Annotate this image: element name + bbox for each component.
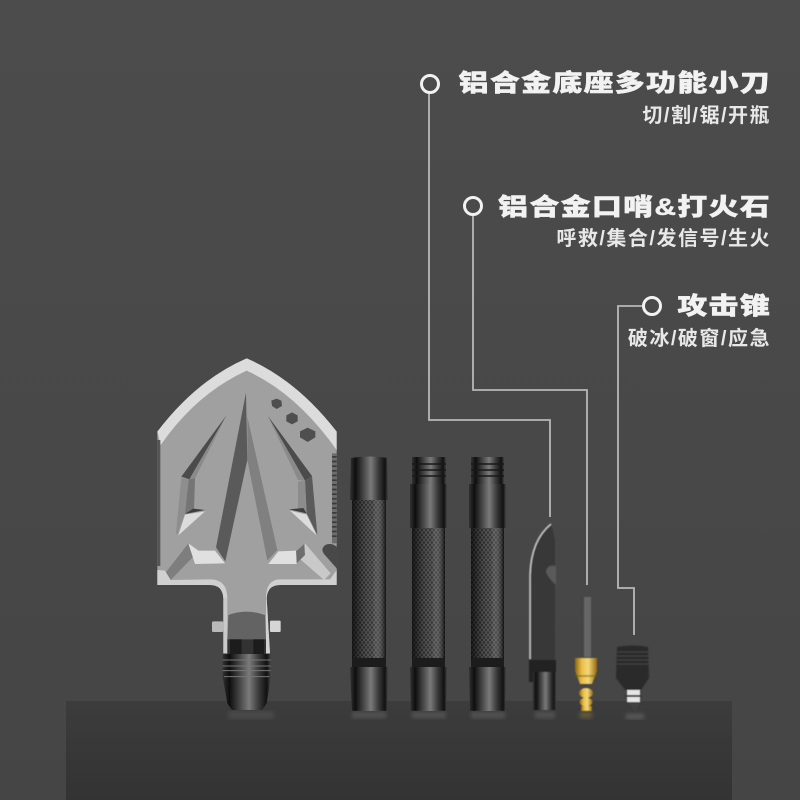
- cone body: [616, 646, 649, 690]
- lower left wing facets: [165, 543, 193, 580]
- knife blade: [529, 523, 555, 660]
- subtext 3: 破冰/破窗/应急: [628, 326, 771, 350]
- marker circle 2: [464, 198, 482, 214]
- icon: tube 2: [410, 457, 447, 711]
- marker circle 3: [644, 298, 660, 314]
- leader line 2: [473, 215, 587, 585]
- tube 2 knurled grip: [412, 528, 445, 660]
- icon: attack cone: [616, 646, 649, 711]
- left side dark edge: [157, 440, 160, 566]
- centre ridge light facet: [247, 417, 277, 561]
- handle socket: [227, 612, 266, 640]
- icon: tube 3: [469, 457, 506, 711]
- tube 2 collar: [410, 484, 447, 528]
- gold body: [575, 658, 597, 684]
- heading 3: 攻击锥: [677, 292, 771, 319]
- light bevel rim: [157, 358, 337, 450]
- tube 2 thread: [412, 457, 446, 484]
- tube 3 knurled grip: [471, 528, 504, 660]
- hex holes: [271, 399, 315, 442]
- knife notch: [546, 566, 556, 585]
- white neck: [627, 690, 640, 702]
- tube 3 collar: [469, 484, 506, 528]
- gold beads: [579, 688, 593, 711]
- icon: knife: [529, 523, 556, 710]
- bolts: [212, 621, 223, 632]
- lower right wing facets: [299, 543, 331, 580]
- heading 2: 铝合金口哨&打火石: [498, 193, 771, 220]
- floor platform: [66, 701, 732, 800]
- marker circle 1: [422, 76, 438, 92]
- tube 1 base: [350, 667, 388, 711]
- left arrow facets: [181, 415, 227, 479]
- bottle opener notch: [322, 544, 340, 568]
- neck edges: [223, 598, 227, 653]
- leader line 1: [429, 93, 550, 517]
- cone tip: [627, 702, 641, 711]
- tube 1 knurled grip: [352, 500, 386, 660]
- centre ridge dark facet: [216, 393, 247, 561]
- subtext 2: 呼救/集合/发信号/生火: [556, 227, 771, 250]
- heading 1: 铝合金底座多功能小刀: [459, 69, 771, 96]
- saw teeth: [332, 453, 337, 543]
- floor reflections: [228, 711, 644, 719]
- icon: whistle and fire starter: [575, 597, 597, 711]
- fire rod: [581, 597, 591, 657]
- icon: tube 1: [350, 456, 388, 711]
- knife collar: [529, 660, 556, 682]
- subtext 1: 切/割/锯/开瓶: [642, 104, 771, 127]
- tube 3 base: [469, 667, 506, 711]
- knife handle: [533, 672, 556, 710]
- panel: shovel head: [157, 358, 340, 710]
- tube 3 thread: [471, 457, 504, 484]
- black ferrule: [223, 654, 271, 710]
- leader line 3: [618, 306, 642, 635]
- tube 1 cap: [350, 456, 388, 500]
- right arrow facets: [268, 416, 312, 481]
- tube 2 base: [410, 667, 447, 711]
- knife edge highlight: [530, 524, 551, 659]
- shovel blade body: [157, 358, 337, 653]
